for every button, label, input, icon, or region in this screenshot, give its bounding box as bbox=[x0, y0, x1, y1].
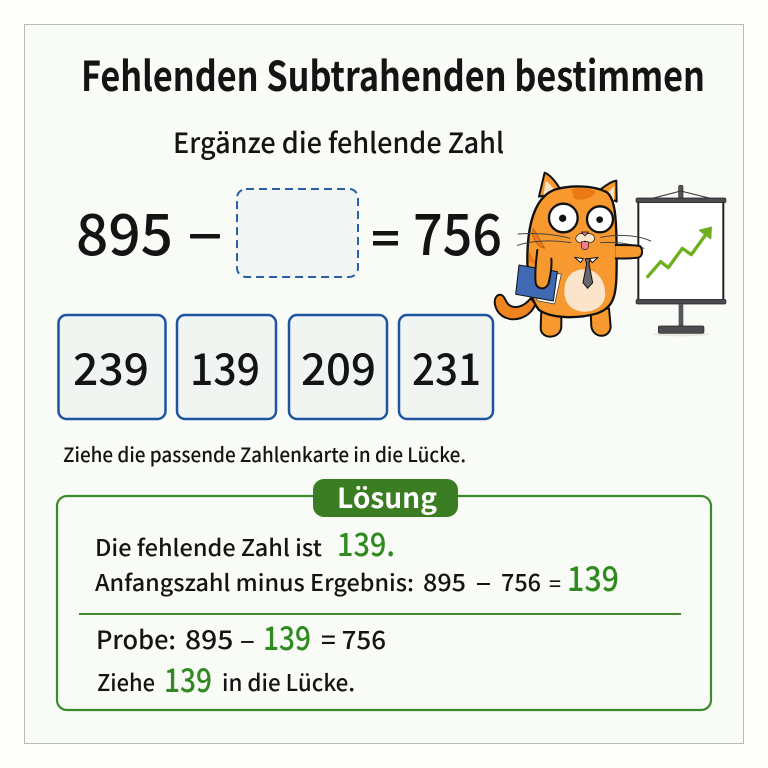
check line bbox=[96, 612, 386, 660]
drag hint: 139 bbox=[164, 654, 212, 702]
explanation line: = bbox=[549, 568, 561, 597]
answer gap bbox=[237, 189, 358, 277]
minus sign bbox=[190, 234, 220, 238]
legs bbox=[541, 310, 561, 337]
solution panel bbox=[57, 477, 711, 710]
muzzle bbox=[576, 234, 595, 243]
answer sentence: 139. bbox=[337, 520, 395, 566]
tail bbox=[495, 295, 536, 319]
explanation line: 139 bbox=[567, 552, 619, 601]
pointing arm bbox=[616, 245, 642, 259]
cat bbox=[495, 173, 651, 337]
divider bbox=[79, 613, 681, 615]
explanation line: 756 bbox=[501, 563, 541, 598]
solution badge bbox=[313, 477, 458, 517]
check line: 139 bbox=[263, 612, 311, 660]
card 209 bbox=[289, 315, 387, 419]
necktie bbox=[583, 259, 593, 288]
head stripe bbox=[571, 188, 596, 200]
card 139: 139 bbox=[190, 334, 260, 398]
panel border bbox=[57, 496, 711, 710]
solution badge: Lösung bbox=[337, 477, 437, 517]
card 239 bbox=[58, 315, 166, 419]
explanation line: Anfangszahl minus Ergebnis: bbox=[95, 564, 414, 598]
equation bbox=[76, 189, 502, 277]
check line: 895 – bbox=[185, 621, 255, 657]
book bbox=[516, 265, 561, 304]
ears bbox=[539, 173, 561, 197]
result: 756 bbox=[413, 190, 502, 272]
collar bbox=[575, 257, 598, 263]
answer sentence bbox=[95, 520, 395, 566]
presentation board bbox=[636, 185, 726, 336]
number cards bbox=[58, 315, 493, 419]
check line: = 756 bbox=[321, 621, 386, 657]
equals sign bbox=[373, 231, 398, 246]
card 239: 239 bbox=[73, 334, 149, 398]
explanation line: 895 bbox=[423, 563, 466, 598]
minuend: 895 bbox=[76, 190, 173, 272]
side stripes bbox=[532, 228, 545, 248]
drag hint: Ziehe bbox=[97, 664, 155, 698]
card 231 bbox=[399, 315, 493, 419]
card 209: 209 bbox=[301, 334, 376, 398]
card 139 bbox=[177, 315, 276, 419]
check line: Probe: bbox=[96, 621, 176, 657]
icon: rising green arrow bbox=[648, 232, 708, 277]
answer sentence: Die fehlende Zahl ist bbox=[95, 529, 322, 563]
subtitle: Ergänze die fehlende Zahl bbox=[173, 122, 504, 162]
body bbox=[527, 186, 617, 317]
instruction text: Ziehe die passende Zahlenkarte in die Lücke. bbox=[63, 439, 466, 468]
illustration: cat presenting chart bbox=[495, 173, 726, 337]
card 231: 231 bbox=[412, 334, 481, 398]
drag hint bbox=[97, 654, 355, 702]
belly bbox=[564, 269, 606, 312]
whiskers bbox=[517, 233, 651, 248]
explanation line bbox=[95, 552, 619, 601]
drag hint: in die Lücke. bbox=[222, 664, 355, 698]
holding arm bbox=[535, 250, 552, 288]
eyes bbox=[549, 204, 578, 232]
